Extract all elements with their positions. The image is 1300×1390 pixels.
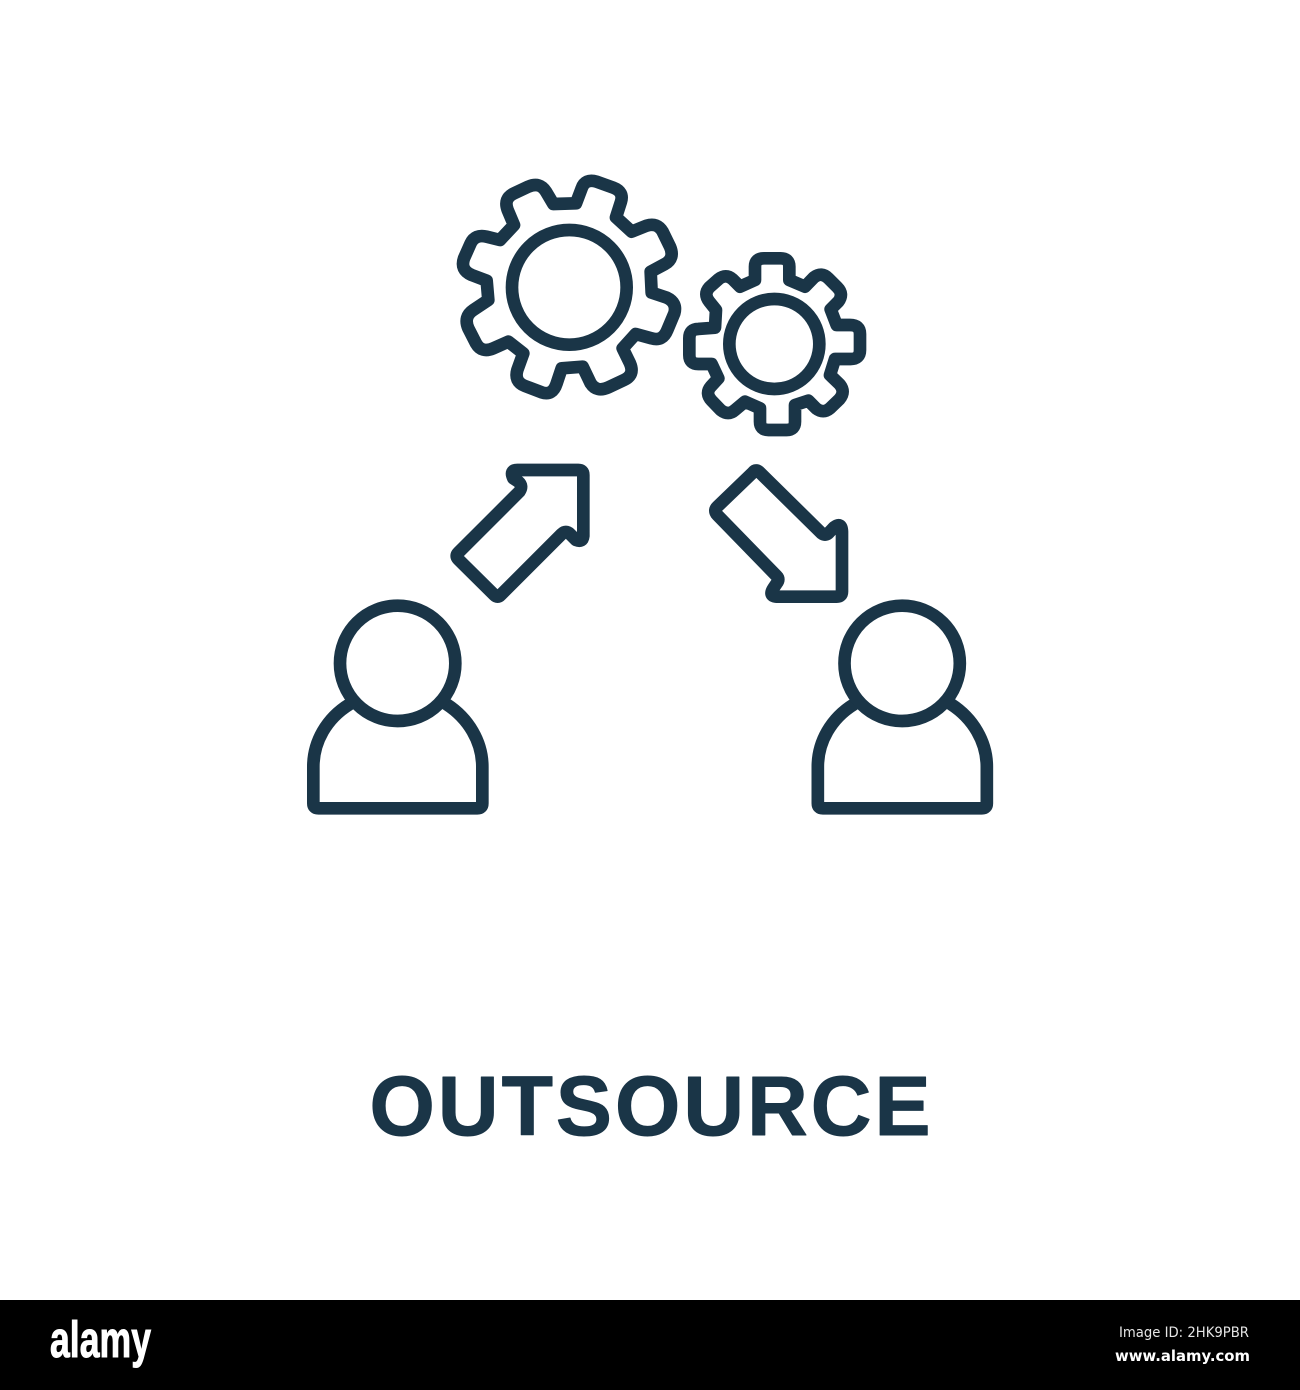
icon: small gear xyxy=(689,258,860,430)
icon: right person xyxy=(818,606,987,808)
footer text: image ID: Image ID: 2HK9PBR xyxy=(1119,1325,1249,1341)
footer text: website: www.alamy.com xyxy=(1115,1347,1250,1365)
arrow: up-right toward gears xyxy=(457,470,583,597)
footer bar xyxy=(0,1300,1300,1390)
icon: left person xyxy=(313,606,482,808)
title: OUTSOURCE: OUTSOURCE xyxy=(370,1059,930,1153)
icon: large gear xyxy=(463,181,675,393)
arrow: down-right from gears xyxy=(715,470,842,597)
footer logo: alamy: alamy xyxy=(50,1311,151,1368)
